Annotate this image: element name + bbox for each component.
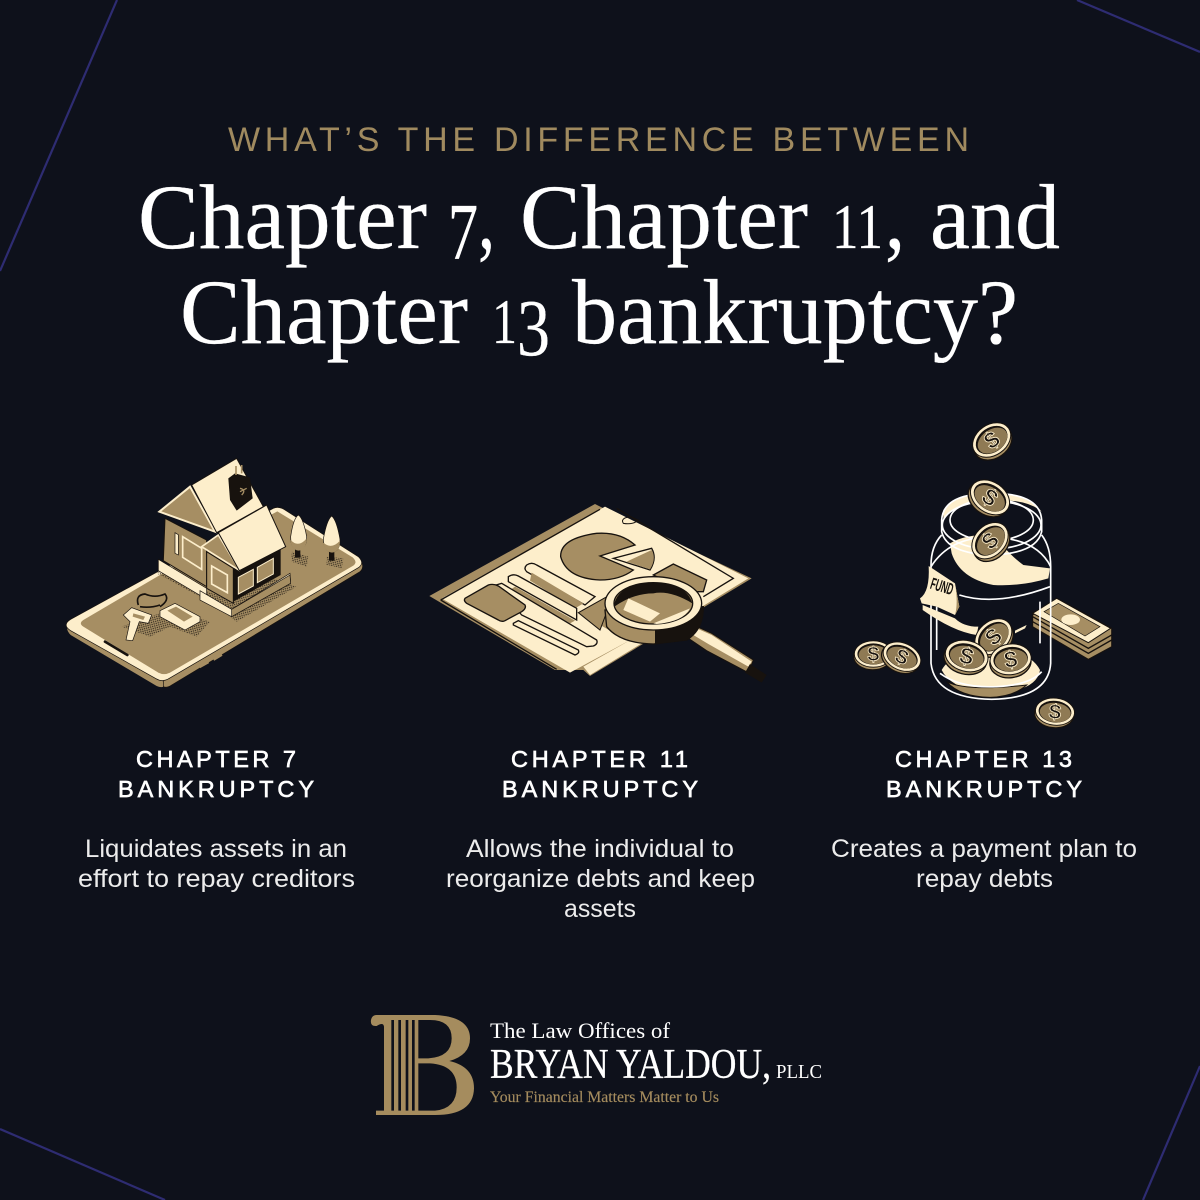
coin: top falling: $ [979, 426, 1004, 454]
coin: pile right [987, 641, 1034, 680]
logo wordmark: BRYAN YALDOU, [490, 1042, 771, 1088]
text: chapter 7 description [78, 835, 355, 893]
coin: pile back: $ [980, 623, 1007, 651]
icon: house on smartphone [66, 458, 363, 687]
coin: outside bottom: $ [1048, 700, 1062, 724]
text: chapter 11 description: reorganize debts and keep [446, 865, 755, 893]
coin: top falling [965, 416, 1019, 467]
title: Chapter [138, 166, 427, 268]
coin: pile left [940, 636, 991, 679]
text: chapter 7 description: Liquidates assets in an [85, 835, 347, 863]
icon: document with magnifying glass [429, 504, 767, 683]
icon: column letter B [371, 1015, 474, 1115]
coin: pile right: $ [1002, 646, 1019, 673]
coin: outside left back [854, 641, 892, 670]
heading: chapter 11: CHAPTER 11 [511, 746, 688, 772]
logo wordmark: Your Financial Matters Matter to Us [490, 1089, 719, 1106]
heading: chapter 7: BANKRUPTCY [118, 776, 314, 802]
coin: inside jar top [964, 515, 1018, 569]
title: Chapter [520, 166, 808, 268]
icon: coin jar with cash [854, 416, 1112, 730]
logo wordmark [490, 1018, 822, 1106]
logo wordmark: PLLC [776, 1061, 822, 1083]
coin: outside left front [877, 636, 925, 679]
text: chapter 13 description: Creates a payment plan to [831, 835, 1137, 863]
heading: chapter 7 [118, 746, 314, 802]
title: 3 [517, 285, 550, 373]
coin: entering jar [961, 472, 1016, 525]
text: chapter 13 description [831, 835, 1137, 893]
heading: chapter 13: BANKRUPTCY [886, 776, 1082, 802]
text: chapter 11 description: assets [564, 895, 636, 923]
coin: pile back [967, 611, 1021, 665]
heading: chapter 13 [886, 746, 1082, 802]
title: , [885, 166, 905, 268]
eyebrow heading: WHAT’S THE DIFFERENCE BETWEEN [228, 121, 969, 159]
panel: chapter 7 [66, 458, 363, 893]
title: 1 [492, 286, 517, 357]
heading: chapter 11: BANKRUPTCY [502, 776, 698, 802]
title: 7 [448, 189, 478, 277]
heading: chapter 7: CHAPTER 7 [136, 746, 296, 772]
title [138, 166, 1060, 373]
coin: outside left front: $ [892, 644, 912, 670]
heading: chapter 13: CHAPTER 13 [895, 746, 1072, 772]
coin: outside bottom [1033, 696, 1076, 730]
title: and [930, 166, 1060, 268]
logo [371, 1015, 822, 1115]
title: 11 [832, 191, 883, 262]
heading: chapter 11 [502, 746, 698, 802]
title: bankruptcy? [572, 261, 1018, 363]
title: , [478, 166, 495, 268]
coin: outside left back: $ [867, 643, 880, 666]
title: Chapter [180, 261, 468, 363]
logo wordmark: The Law Offices of [490, 1018, 671, 1043]
text: chapter 11 description: Allows the individual to [466, 835, 734, 863]
coin: entering jar: $ [977, 484, 1002, 513]
coin: inside jar top: $ [976, 527, 1004, 554]
text: chapter 11 description [446, 835, 755, 923]
text: chapter 13 description: repay debts [916, 865, 1053, 893]
coin: pile left: $ [957, 642, 976, 671]
label: fund: FUND [928, 574, 956, 599]
panel: chapter 13 [831, 416, 1137, 893]
text: chapter 7 description: effort to repay creditors [78, 865, 355, 893]
panel: chapter 11 [429, 504, 767, 923]
